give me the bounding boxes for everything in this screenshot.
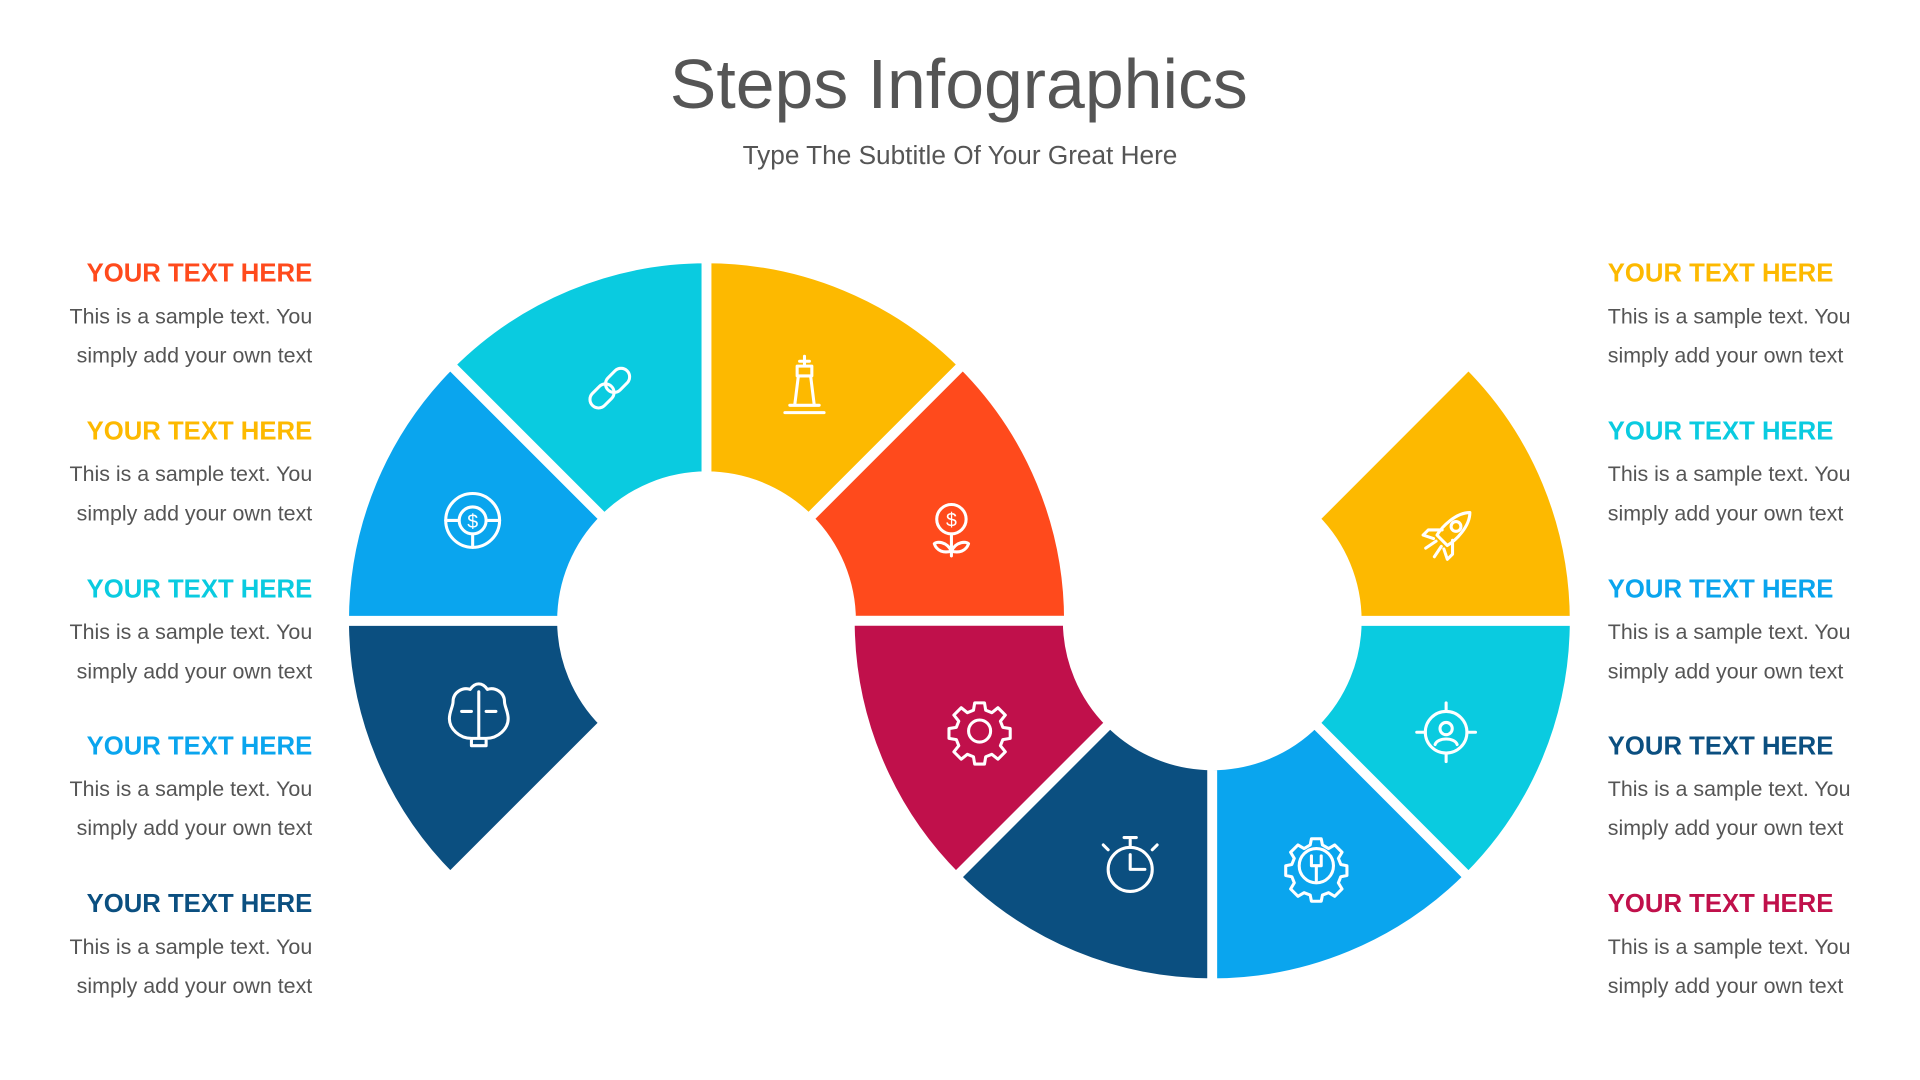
text block: right 5: simply add your own text bbox=[1608, 974, 1843, 998]
text block: left 5: This is a sample text. You bbox=[70, 935, 312, 959]
subtitle: Type The Subtitle Of Your Great Here bbox=[743, 140, 1177, 170]
icon: dollar circle bbox=[446, 493, 500, 547]
text block: left 3: simply add your own text bbox=[77, 659, 312, 683]
text block: left 3 bbox=[70, 576, 312, 683]
text block: right 1: simply add your own text bbox=[1608, 343, 1843, 367]
text block: right 4 bbox=[1608, 732, 1850, 840]
text block: right 4: simply add your own text bbox=[1608, 816, 1843, 840]
segment: navy bottom bbox=[956, 723, 1212, 983]
title: Steps Infographics bbox=[670, 45, 1248, 123]
text block: left 5 bbox=[70, 890, 312, 998]
text block: left 1 bbox=[70, 260, 312, 367]
segment: yellow left bbox=[707, 258, 963, 519]
segment: navy left bbox=[344, 621, 604, 877]
segment: blue bottom bbox=[1212, 723, 1469, 983]
segment: yellow right bbox=[1315, 365, 1575, 621]
right text blocks bbox=[1608, 260, 1850, 998]
icon: money plant: $ bbox=[946, 510, 957, 532]
left text blocks bbox=[70, 260, 312, 998]
text block: left 2: This is a sample text. You bbox=[70, 462, 312, 486]
text block: left 1: This is a sample text. You bbox=[70, 304, 312, 328]
text block: right 3 bbox=[1608, 576, 1850, 683]
segment: crimson bbox=[850, 621, 1110, 877]
text block: right 4: YOUR TEXT HERE bbox=[1608, 732, 1833, 760]
icon: target person bbox=[1417, 703, 1476, 762]
text block: right 5: This is a sample text. You bbox=[1608, 935, 1850, 959]
text block: left 5: simply add your own text bbox=[77, 974, 312, 998]
icon: brain bbox=[449, 684, 508, 746]
text block: right 2: This is a sample text. You bbox=[1608, 462, 1850, 486]
icon: link bbox=[586, 365, 633, 412]
right arc segments bbox=[850, 365, 1575, 983]
icon: dollar circle: $ bbox=[467, 511, 478, 533]
icon: stopwatch bbox=[1103, 838, 1157, 891]
icon: chess king bbox=[785, 356, 824, 413]
text block: right 3: simply add your own text bbox=[1608, 659, 1843, 683]
text block: right 1: YOUR TEXT HERE bbox=[1608, 260, 1833, 288]
left arc segments bbox=[344, 258, 1069, 877]
text block: right 2 bbox=[1608, 418, 1850, 525]
segment: cyan right bbox=[1315, 621, 1575, 877]
icon: gear wrench bbox=[1286, 839, 1347, 901]
text block: right 2: simply add your own text bbox=[1608, 501, 1843, 525]
text block: left 1: YOUR TEXT HERE bbox=[87, 260, 312, 288]
text block: right 3: YOUR TEXT HERE bbox=[1608, 576, 1833, 604]
icon: rocket bbox=[1418, 500, 1482, 565]
segment: blue left bbox=[344, 365, 604, 621]
segment: cyan left bbox=[450, 258, 707, 519]
text block: right 3: This is a sample text. You bbox=[1608, 620, 1850, 644]
text block: left 3: This is a sample text. You bbox=[70, 620, 312, 644]
text block: right 1 bbox=[1608, 260, 1850, 367]
icons bbox=[446, 356, 1482, 901]
text block: left 1: simply add your own text bbox=[77, 343, 312, 367]
text block: left 4: simply add your own text bbox=[77, 816, 312, 840]
icon: money plant bbox=[934, 504, 969, 556]
text block: right 5 bbox=[1608, 890, 1850, 998]
text block: left 4: This is a sample text. You bbox=[70, 777, 312, 801]
icon: gear bbox=[949, 703, 1010, 764]
text block: left 3: YOUR TEXT HERE bbox=[87, 576, 312, 604]
segment: red left bbox=[809, 365, 1069, 621]
text block: right 2: YOUR TEXT HERE bbox=[1608, 418, 1833, 446]
text block: left 4: YOUR TEXT HERE bbox=[87, 732, 312, 760]
text block: right 1: This is a sample text. You bbox=[1608, 304, 1850, 328]
text block: left 5: YOUR TEXT HERE bbox=[87, 890, 312, 918]
text block: left 2: YOUR TEXT HERE bbox=[87, 418, 312, 446]
text block: right 5: YOUR TEXT HERE bbox=[1608, 890, 1833, 918]
text block: left 2 bbox=[70, 418, 312, 525]
text block: left 4 bbox=[70, 732, 312, 840]
text block: right 4: This is a sample text. You bbox=[1608, 777, 1850, 801]
text block: left 2: simply add your own text bbox=[77, 501, 312, 525]
